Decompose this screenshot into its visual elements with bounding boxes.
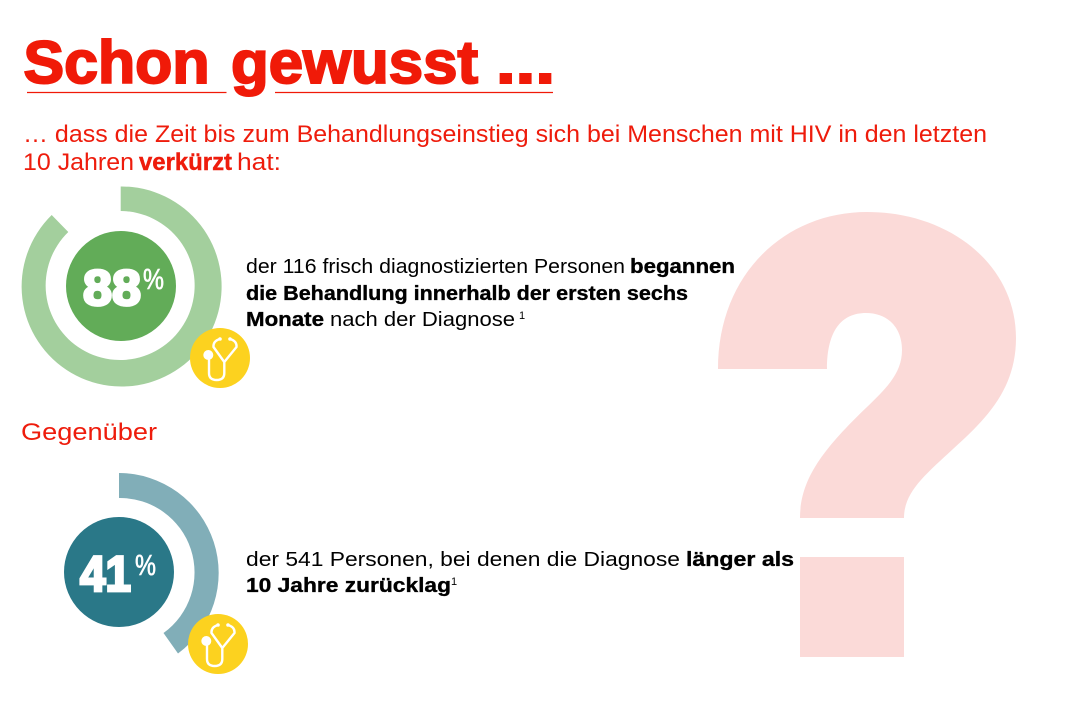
text: 41 percent description: 1 xyxy=(451,576,457,588)
text: 88 percent description: der 116 frisch diagnostizierten Personen xyxy=(246,256,625,278)
center circle 41 percent xyxy=(64,517,174,627)
donut ring 88 percent xyxy=(22,186,222,386)
icon: stethoscope xyxy=(188,614,248,674)
title: Schon xyxy=(24,29,210,96)
text: 41 percent description: 10 Jahre zurücklag xyxy=(246,575,451,597)
panel: 41 percent chart xyxy=(64,473,248,674)
center circle 41 percent: % xyxy=(135,550,156,582)
intro text: … dass die Zeit bis zum Behandlungseinstieg sich bei Menschen mit HIV in den letzten xyxy=(23,121,987,148)
title: gewusst xyxy=(231,29,478,96)
center circle 41 percent: 41 xyxy=(80,546,131,602)
text: 41 percent description: der 541 Personen, bei denen die Diagnose xyxy=(246,549,680,571)
text: 88 percent description xyxy=(246,256,735,331)
intro text: verkürzt xyxy=(139,149,232,176)
center circle 88 percent: 88 xyxy=(83,260,141,316)
text: 88 percent description: nach der Diagnose xyxy=(330,309,515,331)
intro text xyxy=(23,121,987,176)
text: 41 percent description: länger als xyxy=(686,549,794,571)
text: 41 percent description xyxy=(246,549,794,597)
text: 88 percent description: Monate xyxy=(246,309,324,331)
text: 88 percent description: die Behandlung innerhalb der ersten sechs xyxy=(246,283,688,305)
donut ring 41 percent xyxy=(119,473,219,654)
intro text: 10 Jahren xyxy=(23,149,134,176)
center circle 88 percent xyxy=(66,231,176,341)
text: 88 percent description: begannen xyxy=(630,256,735,278)
title: ... xyxy=(496,29,555,96)
center circle 88 percent: % xyxy=(143,264,164,296)
title xyxy=(24,29,555,96)
text: 88 percent description: 1 xyxy=(519,310,525,322)
icon: stethoscope xyxy=(190,328,250,388)
panel: 88 percent chart xyxy=(22,186,250,388)
label: Gegenüber: Gegenüber xyxy=(21,419,157,446)
icon: large pale question mark xyxy=(718,212,1016,657)
intro text: hat: xyxy=(237,149,281,176)
